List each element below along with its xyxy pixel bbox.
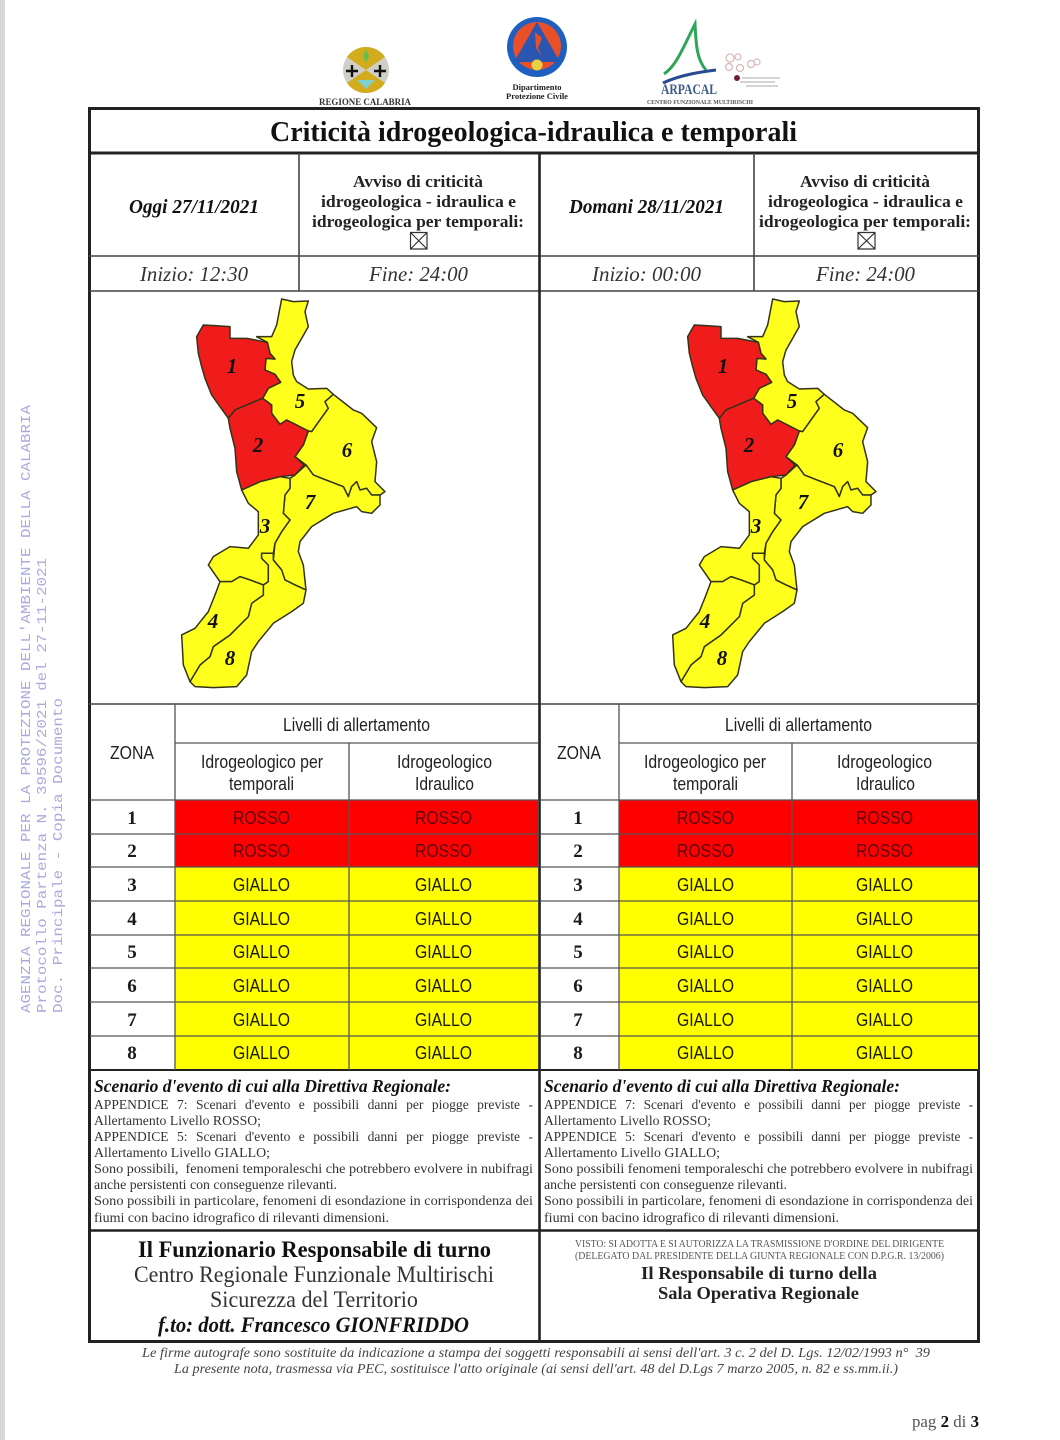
avviso: oggi: idrogeologica - idraulica e [321,192,516,211]
alert levels: GIALLO [415,1009,472,1030]
scenario text: domani: anche persistenti con conseguenze rilevanti. [544,1177,787,1192]
scenario text: oggi: Allertamento Livello ROSSO; [94,1113,261,1128]
logo: Protezione Civile: Dipartimento [512,82,562,92]
zone numbers: 7 [573,1010,583,1031]
zone 2 [228,398,308,490]
alert levels: ROSSO [856,840,913,861]
vertical protocol stamp [20,404,67,1013]
logo: ARPACAL: CENTRO FUNZIONALE MULTIRISCHI [647,99,753,106]
table headers: ZONA [110,742,155,763]
scenario text: oggi: APPENDICE 7: Scenari d'evento e possibili danni per piogge previste - [94,1097,533,1112]
vertical protocol stamp: Protocollo Partenza N. 39596/2021 del 27-11-2021 [36,558,51,1013]
scenario text: domani: Sono possibili in particolare, fenomeni di esondazione in corrispondenza dei [544,1193,973,1208]
zone numbers: 3 [573,875,583,896]
map zone numbers: domani: 4 [699,609,710,633]
zone 3 [208,477,290,585]
scenario text: domani [544,1076,973,1225]
zone numbers: 5 [573,942,583,963]
scenario text: oggi: APPENDICE 5: Scenari d'evento e possibili danni per piogge previste - [94,1129,533,1144]
zone numbers: 4 [127,909,137,930]
alert levels: ROSSO [856,807,913,828]
signature block: funzionario: Sicurezza del Territorio [210,1287,418,1312]
zone numbers: 4 [573,909,583,930]
map zone numbers: oggi: 7 [305,490,317,514]
signature block: sala operativa: Il Responsabile di turno della [641,1263,877,1283]
time range row: Inizio: 00:00 [591,262,701,286]
alert levels: GIALLO [233,908,290,929]
map zone numbers: oggi [207,354,353,670]
alert levels: GIALLO [233,874,290,895]
alert levels: GIALLO [856,908,913,929]
alert levels: ROSSO [677,840,734,861]
scenario text: oggi: fiumi con bacino idrografico di rilevanti dimensioni. [94,1210,389,1225]
logo: ARPACAL: ARPACAL [661,82,717,98]
map zone numbers: domani: 6 [833,438,844,462]
scenario text: domani: Allertamento Livello ROSSO; [544,1113,711,1128]
alert levels: GIALLO [233,1009,290,1030]
scenario text: domani: Scenario d'evento di cui alla Direttiva Regionale: [544,1076,900,1096]
table headers [110,714,492,794]
zone numbers: 8 [127,1043,137,1064]
alert table: oggi [90,704,538,1070]
logo: Protezione Civile: Protezione Civile [506,91,568,101]
zone 6 [295,394,385,497]
table headers: temporali [229,773,294,794]
logo: ARPACAL [647,24,780,106]
table headers: Idrogeologico [837,751,932,772]
avviso: domani: idrogeologica per temporali: [759,212,971,231]
scenario text: oggi: Scenario d'evento di cui alla Direttiva Regionale: [94,1076,451,1096]
logo: Regione Calabria [319,47,411,107]
table headers: Idrogeologico per [644,751,766,772]
zone numbers: 2 [573,841,583,862]
alert levels: ROSSO [415,807,472,828]
map zone numbers: oggi: 6 [342,438,353,462]
alert levels: ROSSO [233,807,290,828]
logo: Regione Calabria: REGIONE CALABRIA [319,97,411,107]
map zone numbers: oggi: 5 [295,389,305,413]
logo: Protezione Civile [506,17,568,101]
table headers: Idrogeologico per [201,751,323,772]
alert levels: GIALLO [415,908,472,929]
table headers: Idrogeologico [397,751,492,772]
alert levels: GIALLO [677,1009,734,1030]
alert levels [233,807,472,1063]
signature block: funzionario [134,1237,494,1337]
scenario text: oggi: anche persistenti con conseguenze rilevanti. [94,1177,337,1192]
avviso: oggi: idrogeologica per temporali: [312,212,524,231]
table headers: Livelli di allertamento [283,714,430,735]
zone numbers: 1 [127,808,137,829]
alert levels: GIALLO [856,874,913,895]
page number: pag 2 di 3 [912,1412,979,1431]
zone 7 [273,465,380,590]
footer note [141,1346,930,1377]
map zone numbers: oggi: 2 [252,433,264,457]
zone numbers: 6 [573,976,583,997]
table headers [557,714,932,794]
signature block: sala operativa [575,1239,944,1303]
alert levels: GIALLO [233,1042,290,1063]
zone numbers: 1 [573,808,583,829]
zone numbers: 8 [573,1043,583,1064]
time range row: Inizio: 12:30 [139,262,248,286]
title: Criticità idrogeologica-idraulica e temporali [270,117,797,148]
time range row: Fine: 24:00 [815,262,915,286]
table headers: Livelli di allertamento [725,714,872,735]
signature block: funzionario: f.to: dott. Francesco GIONFRIDDO [158,1312,469,1337]
table headers: temporali [673,773,738,794]
alert levels: ROSSO [677,807,734,828]
footer note: Le firme autografe sono sostituite da indicazione a stampa dei soggetti responsabili ai sensi dell'art. 3 c. 2 del D. Lgs. 12/02/1993 n° 39 [141,1346,930,1361]
alert levels: GIALLO [415,1042,472,1063]
signature block: funzionario: Centro Regionale Funzionale Multirischi [134,1262,494,1287]
alert levels: GIALLO [856,975,913,996]
scenario text: oggi: Sono possibili in particolare, fenomeni di esondazione in corrispondenza dei [94,1193,533,1208]
alert levels: GIALLO [677,874,734,895]
scenario text: oggi: Sono possibili, fenomeni temporaleschi che potrebbero evolvere in nubifragi [94,1161,533,1176]
time range row [139,262,915,286]
avviso: oggi [312,172,524,249]
zone numbers: 6 [127,976,137,997]
map zone numbers: domani: 1 [718,354,728,378]
alert levels: GIALLO [415,975,472,996]
alert levels: GIALLO [677,908,734,929]
alert levels: GIALLO [856,1009,913,1030]
signature block: sala operativa: Sala Operativa Regionale [658,1283,859,1303]
map zone numbers: domani: 5 [787,389,797,413]
map zone numbers: domani: 8 [717,646,728,670]
map zone numbers: oggi: 8 [225,646,236,670]
alert levels: GIALLO [677,975,734,996]
scenario text: oggi [94,1076,533,1225]
scenario text: domani: Allertamento Livello GIALLO; [544,1145,720,1160]
table headers: ZONA [557,742,602,763]
map: domani [673,299,876,688]
table headers: Idraulico [856,773,915,794]
alert levels: GIALLO [856,1042,913,1063]
zone numbers: 3 [127,875,137,896]
alert levels: ROSSO [415,840,472,861]
scenario text: oggi: Allertamento Livello GIALLO; [94,1145,270,1160]
map zone numbers: domani: 7 [798,490,810,514]
main form frame [89,108,979,1342]
vertical protocol stamp: Doc. Principale - Copia Documento [52,698,67,1013]
avviso: oggi: Avviso di criticità [353,172,483,191]
map zone numbers: domani: 3 [750,514,761,538]
map zone numbers: domani [699,354,844,670]
avviso: domani: idrogeologica - idraulica e [768,192,963,211]
scenario text: domani: fiumi con bacino idrografico di rilevanti dimensioni. [544,1210,839,1225]
zone numbers: 2 [127,841,137,862]
alert levels: GIALLO [677,941,734,962]
header: domani: Domani 28/11/2021 [568,196,724,218]
map zone numbers: domani: 2 [743,433,755,457]
zone 1 [197,325,281,418]
alert levels: GIALLO [856,941,913,962]
table headers: Idraulico [415,773,474,794]
alert levels [677,807,913,1063]
zone numbers: 5 [127,942,137,963]
zone numbers [573,808,583,1064]
zone 4 [182,577,263,682]
zone 5 [257,299,333,432]
footer note: La presente nota, trasmessa via PEC, sostituisce l'atto originale (ai sensi dell'art. 48 del D.Lgs 7 marzo 2005, n. 82 e ss.mm.ii.) [173,1362,898,1377]
alert levels: GIALLO [677,1042,734,1063]
alert levels: GIALLO [415,941,472,962]
alert levels: GIALLO [233,941,290,962]
signature block: funzionario: Il Funzionario Responsabile di turno [138,1237,491,1262]
alert levels: ROSSO [233,840,290,861]
vertical protocol stamp: AGENZIA REGIONALE PER LA PROTEZIONE DELL'AMBIENTE DELLA CALABRIA [20,404,35,1013]
avviso: domani [759,172,971,249]
scenario text: domani: APPENDICE 7: Scenari d'evento e possibili danni per piogge previste - [544,1097,973,1112]
avviso: domani: Avviso di criticità [800,172,930,191]
signature block: sala operativa: (DELEGATO DAL PRESIDENTE DELLA GIUNTA REGIONALE CON D.P.G.R. 13/2006) [575,1251,944,1262]
zone numbers: 7 [127,1010,137,1031]
alert levels: GIALLO [233,975,290,996]
time range row: Fine: 24:00 [368,262,468,286]
map zone numbers: oggi: 1 [227,354,237,378]
map: oggi [182,299,385,688]
signature block: sala operativa: VISTO: SI ADOTTA E SI AUTORIZZA LA TRASMISSIONE D'ORDINE DEL DIRIGENTE [575,1239,944,1250]
map zone numbers: oggi: 4 [207,609,218,633]
zone 8 [190,553,306,688]
zone numbers [127,808,137,1064]
map zone numbers: oggi: 3 [259,514,270,538]
header: oggi: Oggi 27/11/2021 [129,196,259,218]
scenario text: domani: APPENDICE 5: Scenari d'evento e possibili danni per piogge previste - [544,1129,973,1144]
scenario text: domani: Sono possibili fenomeni temporaleschi che potrebbero evolvere in nubifragi [544,1161,973,1176]
alert levels: GIALLO [415,874,472,895]
alert table: domani [541,704,978,1070]
